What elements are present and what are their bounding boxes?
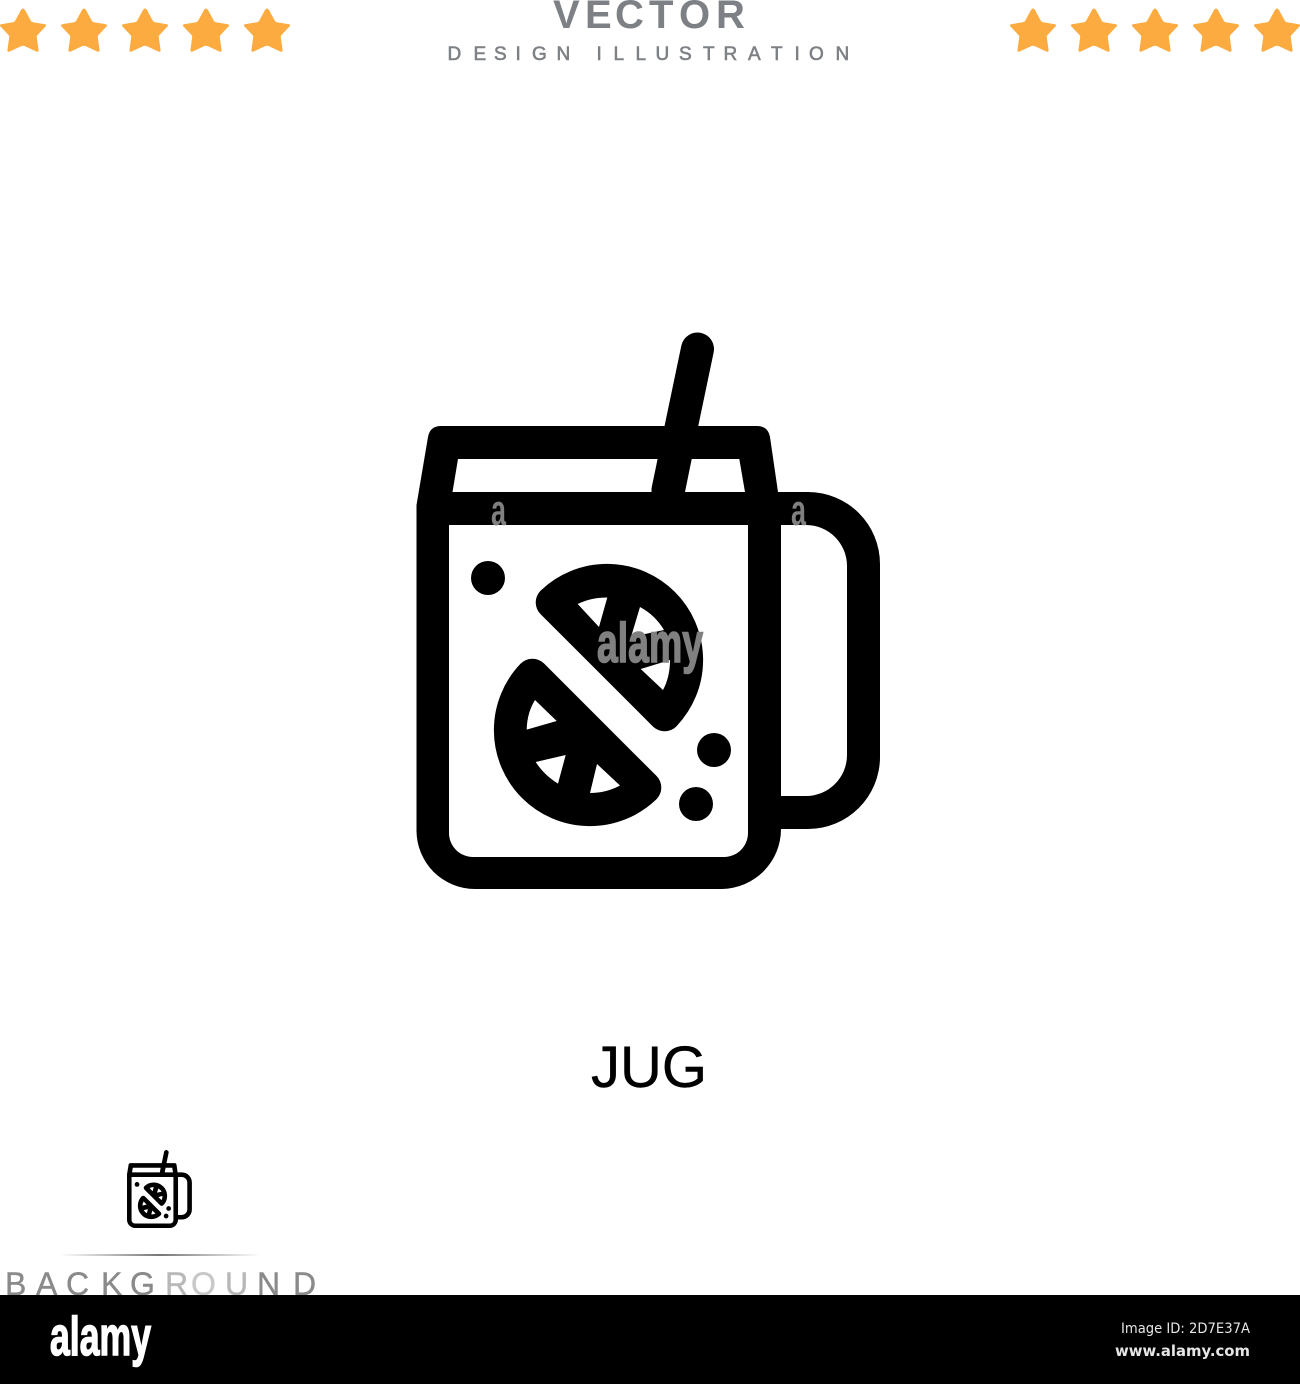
footer text: website: www.alamy.com	[1115, 1342, 1250, 1360]
icon: large jug with lemon slices and straw	[416, 349, 880, 889]
label: background: A	[36, 1266, 58, 1302]
label: background: U	[225, 1266, 248, 1302]
footer logo: alamy: alamy	[50, 1305, 151, 1367]
watermark: central alamy: alamy	[597, 611, 703, 674]
label: background: O	[191, 1266, 216, 1302]
watermark: small letter on handle: a	[791, 486, 806, 535]
watermark: small letter on jug rim: a	[491, 486, 506, 535]
subheading: design illustration: DESIGN ILLUSTRATION	[448, 44, 849, 65]
icon: small jug	[127, 1152, 192, 1228]
label: background: C	[66, 1266, 89, 1302]
icon: right row of stars	[1010, 8, 1300, 52]
label: background: R	[165, 1266, 188, 1302]
label: background: N	[257, 1266, 280, 1302]
label: background: B	[5, 1266, 26, 1302]
icon: left row of stars	[0, 8, 290, 52]
label: background: D	[293, 1266, 316, 1302]
label: background: G	[130, 1266, 155, 1302]
footer bar	[0, 1295, 1300, 1384]
title: jug: JUG	[591, 1035, 707, 1100]
label: background: K	[101, 1266, 122, 1302]
footer text: image id: Image ID: 2D7E37A	[1121, 1321, 1250, 1337]
divider line	[60, 1254, 260, 1256]
